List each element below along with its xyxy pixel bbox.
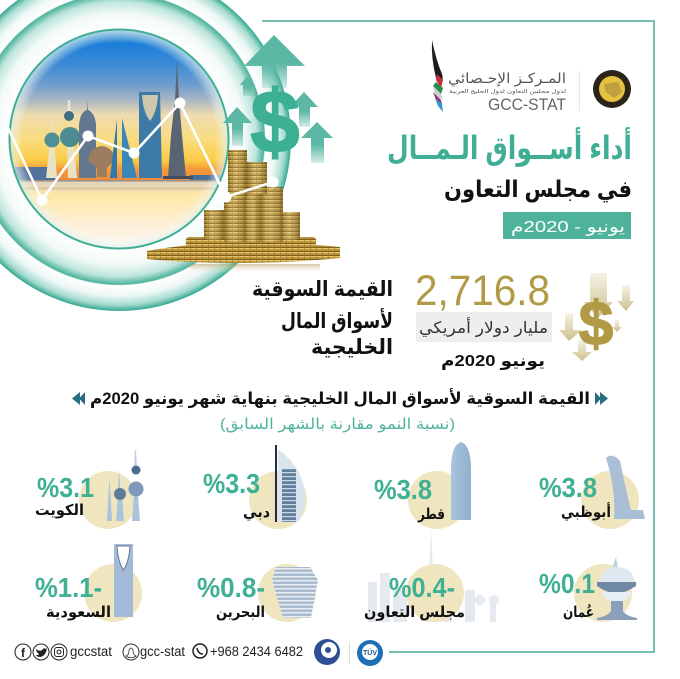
market value label: الخليجية <box>311 336 393 359</box>
card: Bahrain <box>197 564 318 622</box>
card: Oman: عُمان <box>563 604 594 621</box>
skyline photo disc <box>10 30 228 248</box>
logo: GCC-STAT: المـركـز الإحـصائي <box>448 70 566 87</box>
logo: certification <box>314 639 340 665</box>
icon: instagram <box>51 644 67 660</box>
icon: snapchat <box>123 644 139 660</box>
coin stacks <box>147 150 340 274</box>
date badge: يونيو - 2020م <box>511 219 625 237</box>
Oman burner <box>88 146 115 177</box>
card: GCC: %0.4- <box>389 572 455 603</box>
card: GCC <box>364 530 499 622</box>
card: Bahrain: البحرين <box>216 604 265 621</box>
icon: twitter <box>33 644 49 660</box>
Kingdom tower <box>139 92 162 178</box>
card: Abu Dhabi: أبوظبي <box>561 502 611 521</box>
card: GCC: مجلس التعاون <box>364 604 465 621</box>
up arrows <box>223 35 333 163</box>
unit box: مليار دولار أمريكي <box>419 317 548 338</box>
card: Qatar: قطر <box>417 506 445 523</box>
phone: +968 2434 6482 <box>210 644 303 659</box>
icon: gold dollar with down arrows <box>559 273 634 361</box>
card: Oman <box>539 557 637 622</box>
icon: facebook: f <box>21 646 26 660</box>
Kuwait towers <box>46 115 77 178</box>
card: Kuwait: %3.1 <box>37 472 94 503</box>
logo: GCC-STAT: لدول مجلس التعاون لدول الخليج العربية <box>449 89 566 95</box>
subtitle: في مجلس التعاون <box>444 176 632 203</box>
Bahrain WTC <box>110 119 117 178</box>
logo: TUV: TÜV <box>363 648 377 657</box>
card: Qatar <box>374 442 471 529</box>
market value label: لأسواق المال <box>281 307 393 333</box>
card: Kuwait <box>35 450 144 529</box>
logo: GCC-STAT: GCC-STAT <box>488 95 566 114</box>
handle: gccstat <box>70 644 112 659</box>
footer contacts <box>15 639 383 666</box>
section subtitle: (نسبة النمو مقارنة بالشهر السابق) <box>220 416 455 433</box>
market value date: يونيو 2020م <box>441 353 545 370</box>
card: Dubai: دبي <box>243 504 270 521</box>
icon: gold dollar with down arrows: $ <box>579 290 613 359</box>
market value label <box>252 278 393 359</box>
hero illustration <box>0 0 340 311</box>
concentric rings <box>0 0 291 311</box>
date badge <box>503 212 631 239</box>
logo: TUV <box>357 640 383 666</box>
section heading: القيمة السوقية لأسواق المال الخليجية بنهاية شهر يونيو 2020م <box>90 388 590 409</box>
card: Oman: %0.1 <box>539 568 595 599</box>
icon: dollar sign: $ <box>251 72 299 171</box>
tower <box>79 100 96 178</box>
market value number: 2,716.8 <box>415 267 550 315</box>
card: Dubai: %3.3 <box>203 468 260 499</box>
logo: GCC seal <box>593 70 631 108</box>
card: Saudi Arabia: السعودية <box>46 604 111 621</box>
page frame <box>262 21 654 652</box>
icon: left chevrons <box>72 392 85 405</box>
card: Abu Dhabi: %3.8 <box>539 472 597 503</box>
logo: GCC-STAT <box>432 40 580 114</box>
market value label: القيمة السوقية <box>252 278 393 301</box>
card: Kuwait: الكويت <box>35 502 84 519</box>
line chart <box>8 98 278 206</box>
handle: gcc-stat <box>140 644 185 659</box>
icon: facebook <box>15 644 31 660</box>
card: Abu Dhabi <box>539 456 645 529</box>
card: Bahrain: %0.8- <box>197 572 265 603</box>
card: Saudi Arabia <box>35 544 142 622</box>
card: Saudi Arabia: %1.1- <box>35 572 102 603</box>
unit box <box>416 312 552 342</box>
card: Dubai <box>203 445 307 529</box>
icon: whatsapp <box>193 644 207 658</box>
card: Qatar: %3.8 <box>374 474 432 505</box>
icon: right chevrons <box>595 392 608 405</box>
Burj <box>168 60 186 178</box>
